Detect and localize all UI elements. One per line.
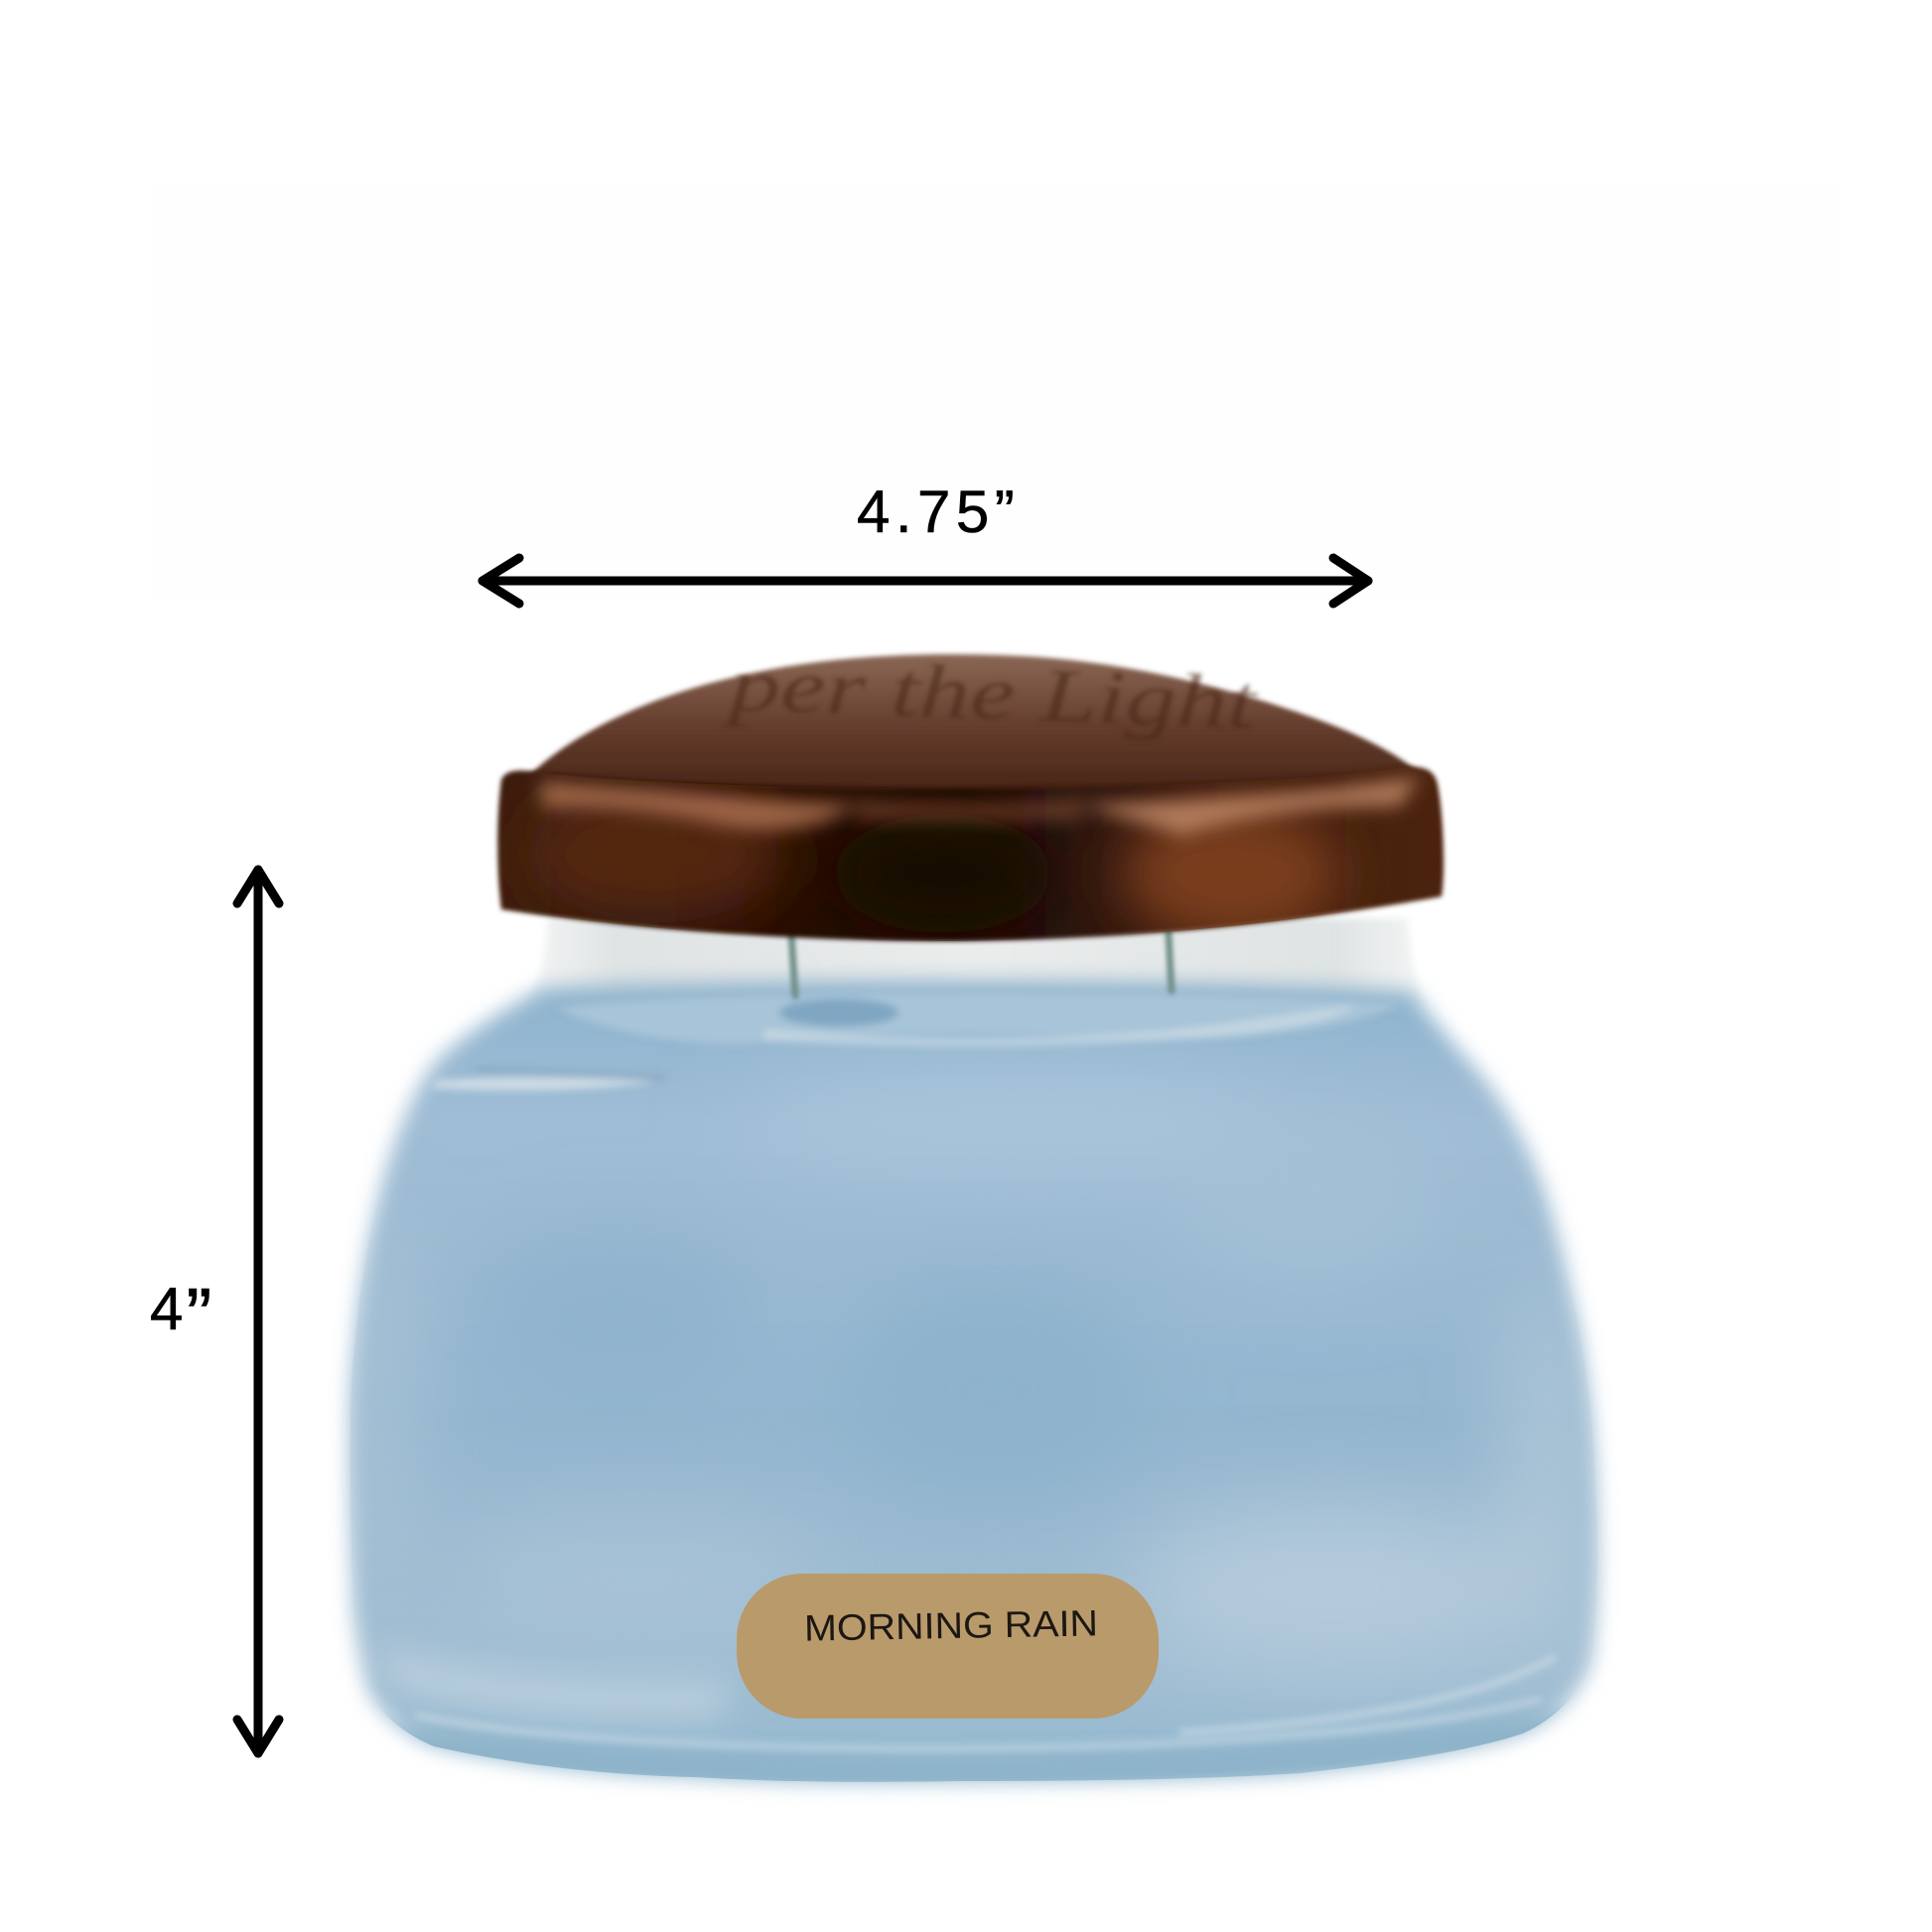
frost at base <box>377 1648 725 1719</box>
wax body <box>350 981 1597 1782</box>
infographic: candle jar dimensions <box>151 490 1610 1796</box>
label text: MORNING RAIN <box>804 1602 1098 1649</box>
wax cloud shading <box>347 1072 1579 1774</box>
lid rim <box>497 767 1444 941</box>
candle jar <box>347 643 1597 1782</box>
lid dome <box>528 654 1420 806</box>
height arrow <box>237 870 279 1753</box>
glass base <box>417 1658 1554 1748</box>
embossed lid lettering: per the Light <box>722 643 1260 745</box>
height label: 4 <box>150 1276 186 1342</box>
width arrow <box>483 558 1368 604</box>
wax surface at shoulder <box>432 993 1400 1090</box>
height label: ” <box>186 1272 214 1359</box>
width label: 4.75” <box>857 479 1020 545</box>
darker glass foot <box>357 1723 1579 1774</box>
jar neck glass <box>526 918 1426 1005</box>
wicks <box>791 933 1172 996</box>
rim sheen <box>526 776 1420 943</box>
label sticker <box>737 1574 1159 1719</box>
label <box>737 1574 1159 1719</box>
